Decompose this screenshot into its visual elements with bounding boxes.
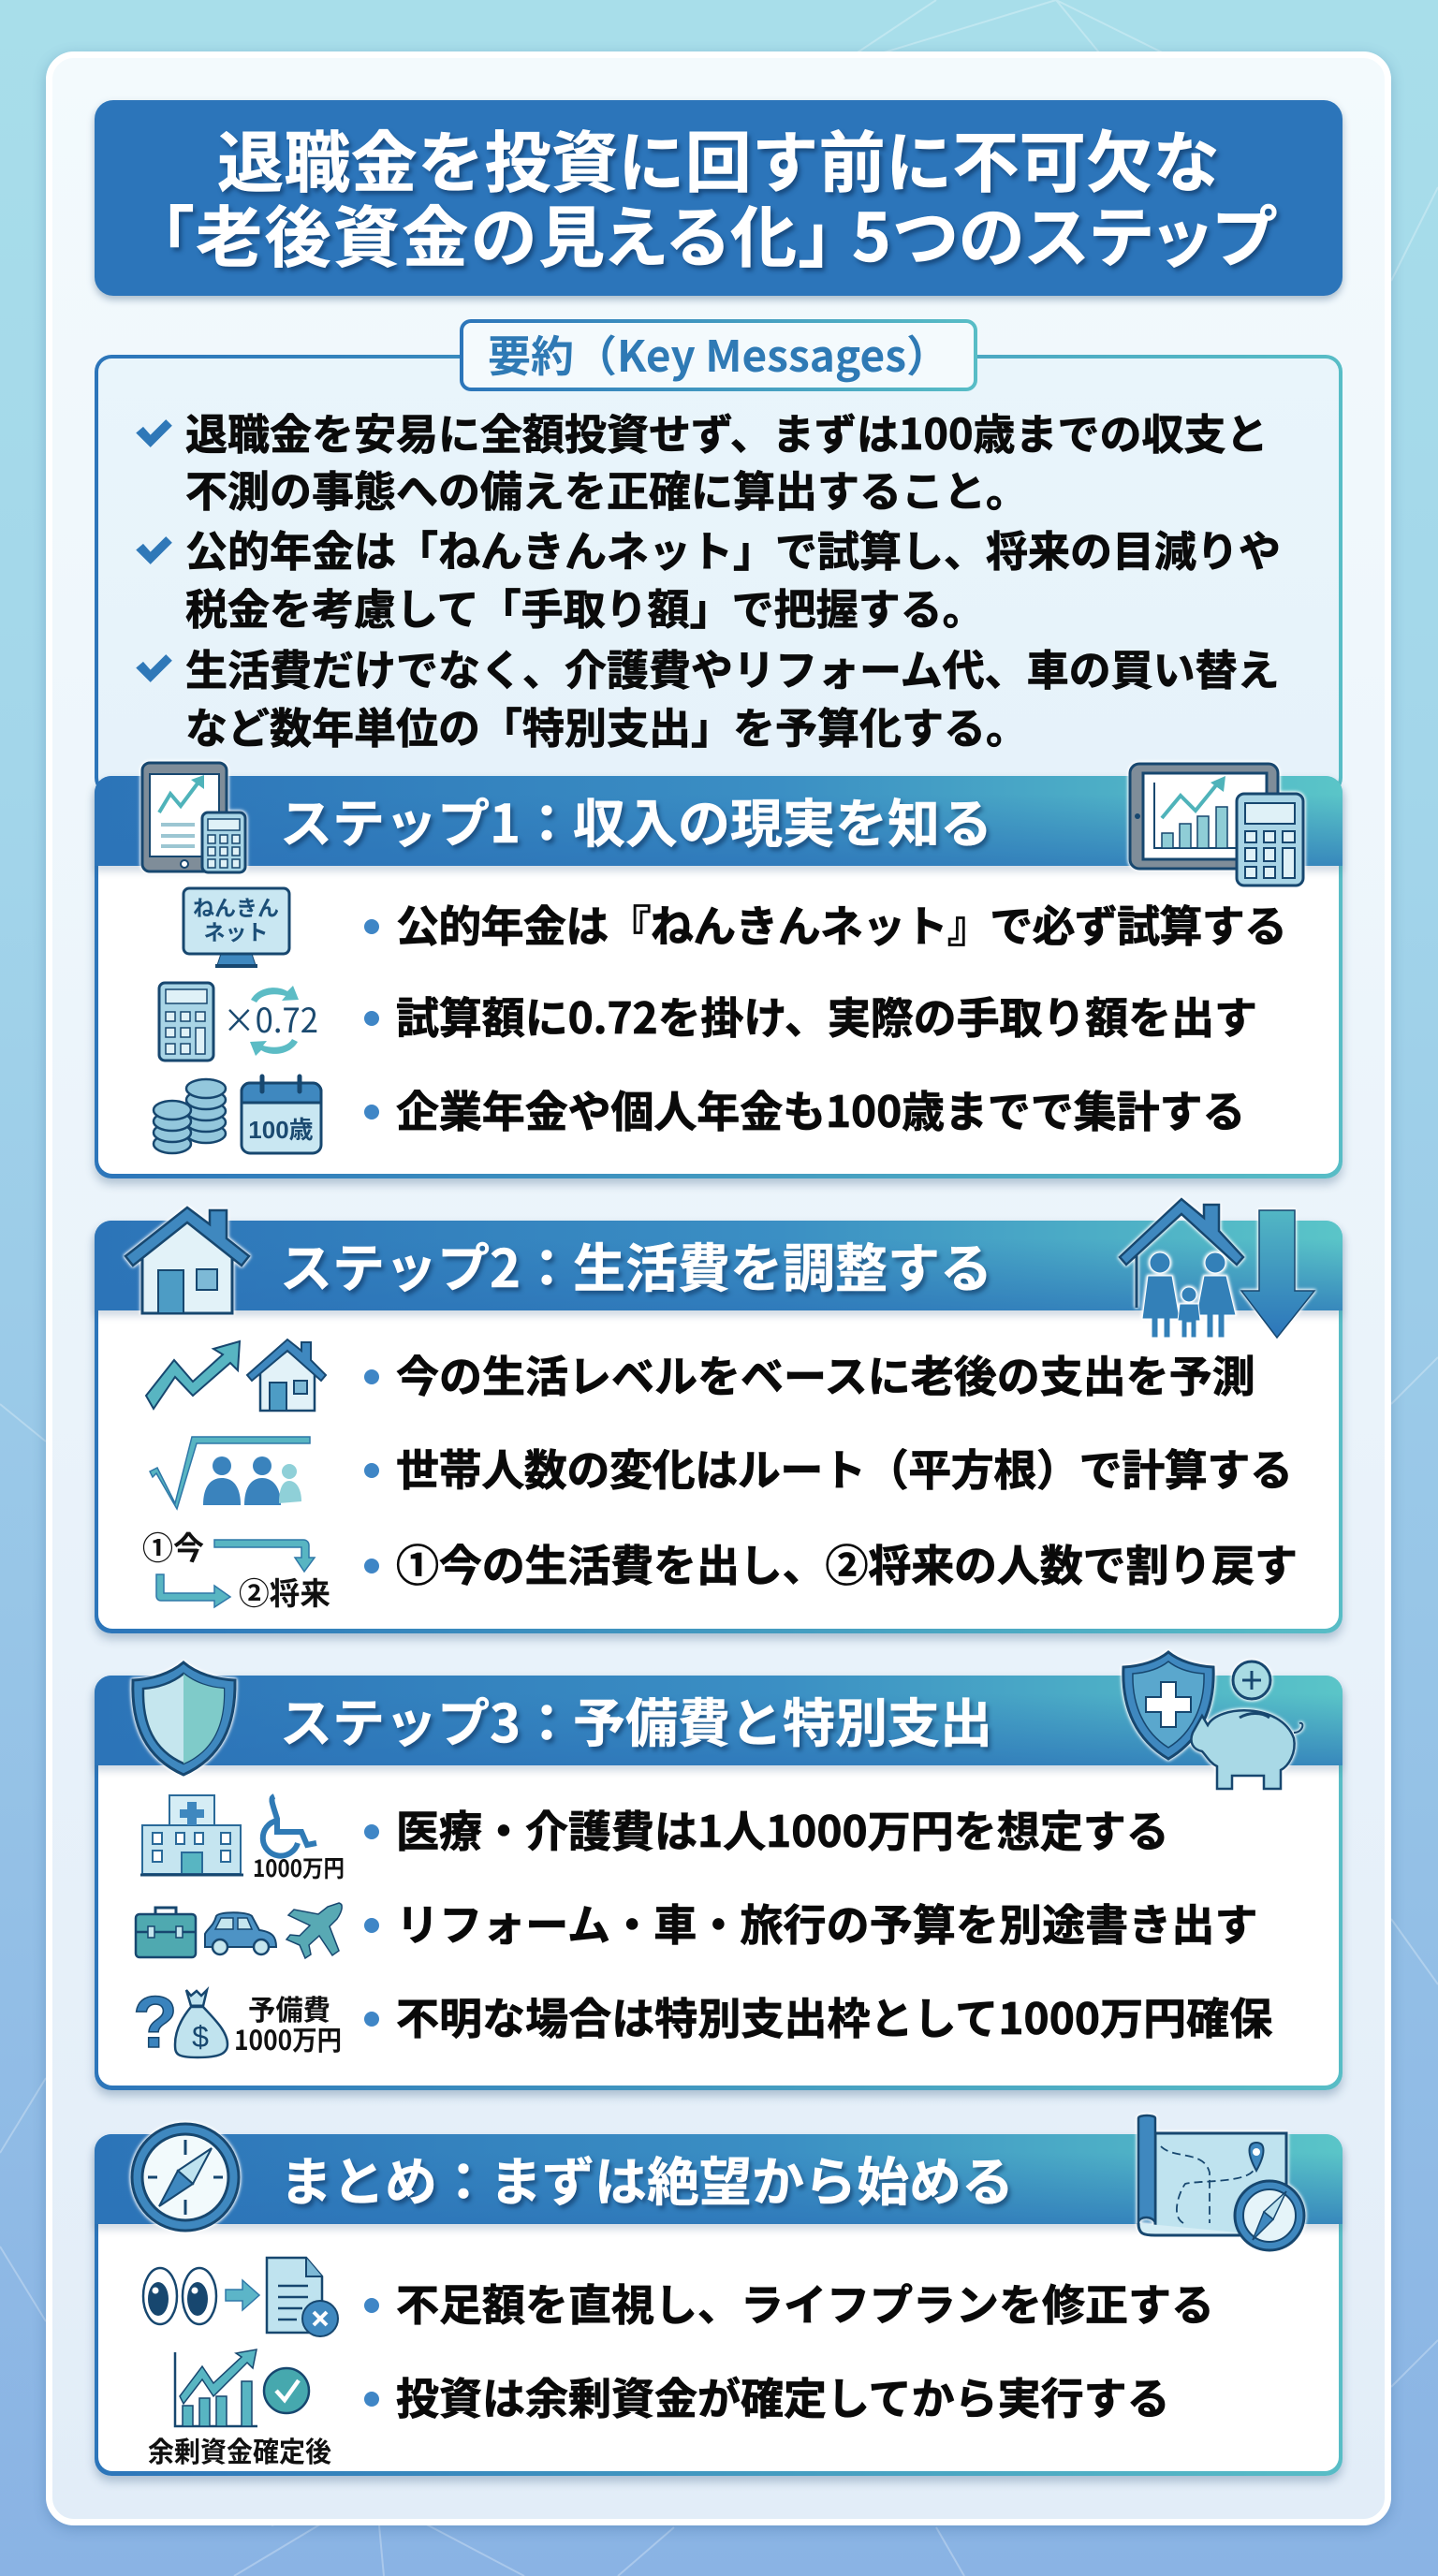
icon: medical shield and piggy bank xyxy=(1118,1649,1307,1790)
icon: now to future flow: ①今 xyxy=(142,1523,204,1569)
icon: now to future flow: ②将来 xyxy=(239,1569,330,1614)
key message 1 check icon xyxy=(136,419,172,447)
key message 3 text line 2: など数年単位の「特別支出」を予算化する。 xyxy=(185,695,1028,755)
row 3 text: ①今の生活費を出し、②将来の人数で割り戻す xyxy=(396,1532,1298,1594)
row 2 text: リフォーム・車・旅行の予算を別途書き出す xyxy=(396,1892,1258,1954)
icon: now to future flow xyxy=(142,1523,330,1614)
summary header band xyxy=(95,2134,1343,2224)
icon: calculator times 0.72: ×0.72 xyxy=(223,994,318,1043)
row 1 bullet xyxy=(364,1824,379,1839)
step 1 header band: ステップ1：収入の現実を知る xyxy=(280,783,992,858)
icon: tablet chart and calculator right xyxy=(1125,760,1309,887)
row 1 bullet xyxy=(364,2298,379,2313)
icon: house xyxy=(122,1206,253,1316)
icon: question mark, money bag, reserve 10 million yen: 予備費 xyxy=(248,1987,330,2028)
row 3 bullet xyxy=(364,1105,379,1120)
title banner: 退職金を投資に回す前に不可欠な xyxy=(217,110,1220,206)
panel: key messages xyxy=(95,355,1343,795)
step 3 header band xyxy=(95,1676,1343,1765)
row 2 text: 世帯人数の変化はルート（平方根）で計算する xyxy=(396,1437,1293,1499)
key message 3 check icon xyxy=(136,654,172,682)
key message 1 text line 2: 不測の事態への備えを正確に算出すること。 xyxy=(185,458,1028,519)
icon: growth chart, check and surplus label xyxy=(148,2349,331,2470)
key messages label: 要約（Key Messages） xyxy=(488,323,949,385)
title banner: 「老後資金の見える化」 5つのステップ xyxy=(160,185,1277,281)
step 1 header band xyxy=(95,776,1343,866)
row 1 text: 今の生活レベルをベースに老後の支出を予測 xyxy=(396,1343,1255,1405)
row 1 bullet xyxy=(364,919,379,934)
icon: coins and 100 calendar xyxy=(152,1075,322,1155)
step 2 header band: ステップ2：生活費を調整する xyxy=(280,1227,992,1303)
icon: nenkin net monitor: ネット xyxy=(204,915,268,946)
step 2 header band xyxy=(95,1221,1343,1310)
icon: growth chart, check and surplus label: 余剰資金確定後 xyxy=(148,2429,331,2470)
panel: step 2 xyxy=(95,1221,1343,1633)
row 1 bullet xyxy=(364,1369,379,1384)
row 3 text: 企業年金や個人年金も100歳までで集計する xyxy=(396,1078,1245,1140)
icon: shield xyxy=(127,1661,240,1777)
icon: coins and 100 calendar: 100歳 xyxy=(248,1116,314,1144)
icon: hospital and wheelchair: 1000万円 xyxy=(253,1851,345,1884)
key message 2 text line 2: 税金を考慮して「手取り額」で把握する。 xyxy=(185,576,985,637)
icon: calculator times 0.72 xyxy=(157,981,318,1061)
summary header band: まとめ：まずは絶望から始める xyxy=(280,2141,1014,2217)
icon: tablet and calculator left xyxy=(137,760,251,874)
row 2 bullet xyxy=(364,1918,379,1933)
row 3 bullet xyxy=(364,2012,379,2027)
step 3 header band: ステップ3：予備費と特別支出 xyxy=(280,1682,992,1758)
icon: rising arrow and house xyxy=(144,1339,328,1412)
icon: eyes looking at document xyxy=(142,2256,339,2337)
key message 3 text: 生活費だけでなく、介護費やリフォーム代、車の買い替え xyxy=(185,637,1280,697)
row 2 bullet xyxy=(364,1011,379,1026)
panel: summary xyxy=(95,2134,1343,2476)
icon: briefcase, car and plane xyxy=(135,1902,343,1960)
row 1 text: 医療・介護費は1人1000万円を想定する xyxy=(396,1798,1169,1860)
panel: step 1 xyxy=(95,776,1343,1178)
icon: hospital and wheelchair xyxy=(140,1793,345,1884)
row 2 text: 試算額に0.72を掛け、実際の手取り額を出す xyxy=(396,985,1257,1046)
row 3 text: 不明な場合は特別支出枠として1000万円確保 xyxy=(396,1985,1272,2047)
key message 2 text: 公的年金は「ねんきんネット」で試算し、将来の目減りや xyxy=(185,518,1281,578)
icon: map with pin and compass xyxy=(1134,2113,1309,2252)
row 2 bullet xyxy=(364,1463,379,1478)
icon: question mark, money bag, reserve 10 million yen: 1000万円 xyxy=(234,2019,342,2058)
row 2 bullet xyxy=(364,2392,379,2407)
row 1 text: 公的年金は『ねんきんネット』で必ず試算する xyxy=(396,893,1286,955)
key message 1 text: 退職金を安易に全額投資せず、まずは100歳までの収支と xyxy=(185,401,1269,461)
icon: nenkin net monitor: ねんきん xyxy=(193,890,279,922)
icon: question mark, money bag, reserve 10 million yen xyxy=(133,1981,342,2063)
icon: question mark, money bag, reserve 10 million yen: ? xyxy=(133,1981,178,2063)
key message 2 check icon xyxy=(136,536,172,564)
icon: square root with people xyxy=(149,1436,311,1511)
icon: family house with down arrow xyxy=(1116,1197,1318,1339)
icon: question mark, money bag, reserve 10 million yen: $ xyxy=(192,2020,209,2054)
panel: step 3 xyxy=(95,1676,1343,2090)
row 1 text: 不足額を直視し、ライフプランを修正する xyxy=(396,2272,1214,2334)
icon: nenkin net monitor xyxy=(182,887,290,968)
title banner xyxy=(95,100,1343,296)
icon: compass xyxy=(127,2121,243,2232)
row 3 bullet xyxy=(364,1559,379,1573)
row 2 text: 投資は余剰資金が確定してから実行する xyxy=(396,2365,1170,2427)
